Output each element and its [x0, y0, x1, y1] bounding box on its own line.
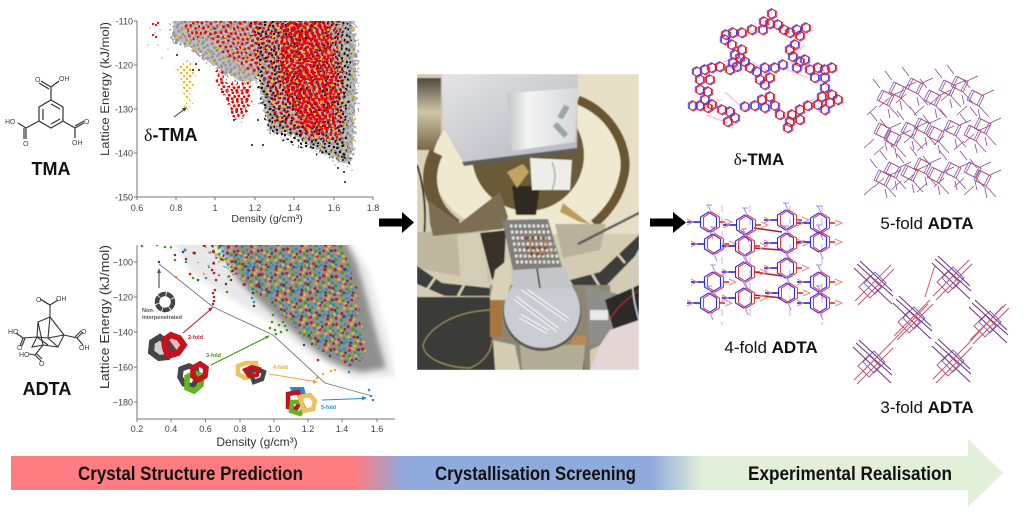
axes: ADTA plot: −180 [113, 398, 133, 408]
axes: TMA plot [100, 16, 379, 225]
hub [472, 128, 584, 211]
axes: TMA plot: 1 [212, 203, 218, 213]
stage base [490, 285, 612, 370]
axes: TMA plot: 0.6 [131, 203, 143, 213]
annotation: delta-TMA arrow and label: δ-TMA [144, 125, 197, 145]
axes: TMA plot: -140 [115, 148, 133, 158]
workflow arrow [11, 439, 1003, 507]
axes: TMA plot: -110 [116, 16, 133, 26]
icon: ADTA molecule: OH [56, 296, 66, 303]
icon: ADTA molecule: HO [19, 352, 30, 359]
axes: ADTA plot: 1.0 [268, 424, 280, 434]
label: ADTA: ADTA [23, 379, 71, 399]
label: delta-TMA: δ-TMA [734, 150, 784, 169]
callout: 5-fold [288, 387, 367, 414]
icon: TMA molecule [5, 76, 90, 148]
chart: ADTA lattice energy vs density scatter [100, 245, 395, 448]
annotation: delta-TMA arrow and label [144, 107, 197, 145]
axes: ADTA plot: 1.4 [336, 424, 348, 434]
axes: ADTA plot: −160 [113, 362, 133, 372]
well plate [502, 219, 562, 270]
axes: TMA plot: Lattice Energy (kJ/mol) [100, 22, 112, 156]
icon: ADTA molecule: OH [79, 345, 90, 352]
axes: TMA plot: 1.8 [367, 203, 379, 213]
dark segmented bands [417, 266, 490, 296]
axes: TMA plot: 0.8 [170, 203, 182, 213]
axes: TMA plot: 1.6 [328, 203, 340, 213]
axes: TMA plot: 1.4 [288, 203, 300, 213]
brown ring arcs [430, 153, 456, 226]
axes: TMA plot: -150 [115, 192, 133, 202]
callout: non-interpenetrated [142, 268, 182, 321]
axes: ADTA plot: 0.4 [165, 424, 177, 434]
axes: ADTA plot: Lattice Energy (kJ/mol) [97, 245, 112, 389]
axes: ADTA plot: 0.8 [234, 424, 246, 434]
metal arm [428, 192, 508, 236]
axes: ADTA plot: Density (g/cm³) [216, 435, 298, 449]
icon: ADTA molecule: O [39, 361, 45, 368]
label: TMA: TMA [32, 159, 70, 179]
crystal structure: 4-fold ADTA [687, 203, 842, 325]
white module [530, 158, 572, 190]
crystal structure: 5-fold ADTA [864, 65, 1001, 198]
crystal structure: 3-fold ADTA [853, 256, 1009, 384]
axes: TMA plot: -120 [115, 60, 133, 70]
arrow: to structures [650, 212, 686, 233]
callout: 3-fold: 3-fold [206, 353, 221, 359]
callout: 2-fold: 2-fold [188, 335, 203, 341]
detector hood [442, 74, 578, 162]
axes: ADTA plot: −100 [113, 258, 133, 268]
stage: Crystal Structure Prediction: Crystal Structure Prediction [78, 464, 303, 485]
icon: TMA molecule: O [84, 119, 90, 126]
axes: ADTA plot: −120 [113, 292, 133, 302]
label: 4-fold ADTA: 4-fold ADTA [724, 338, 818, 357]
icon: ADTA molecule: O [81, 329, 87, 336]
arrow: to photo [379, 212, 414, 233]
chart: TMA lattice energy vs density scatter [100, 18, 379, 224]
icon: TMA molecule: O [23, 141, 29, 148]
callout: 5-fold: 5-fold [321, 405, 336, 411]
axes: ADTA plot: 1.6 [371, 424, 383, 434]
axes: TMA plot: -130 [115, 104, 133, 114]
callout: 4-fold [238, 363, 318, 384]
mid-left surfaces [417, 232, 490, 282]
crystal structure: delta-TMA [688, 9, 843, 133]
axes: ADTA plot [97, 245, 395, 449]
callout: 2-fold [151, 307, 213, 358]
callout: non-interpenetrated: interpenetrated [142, 315, 182, 321]
axes: ADTA plot: 0.6 [199, 424, 212, 434]
icon: TMA molecule: HO [5, 119, 16, 126]
stage: Crystallisation Screening: Crystallisation Screening [435, 464, 636, 485]
plate carrier [507, 266, 573, 290]
label: 5-fold ADTA: 5-fold ADTA [880, 214, 974, 233]
icon: ADTA molecule [8, 296, 90, 368]
sample disc [502, 296, 582, 352]
callout: 4-fold: 4-fold [273, 365, 288, 371]
icon: TMA molecule: OH [72, 140, 82, 147]
axes: ADTA plot: 1.2 [302, 424, 314, 434]
stage: Experimental Realisation: Experimental Realisation [748, 464, 952, 485]
axes: ADTA plot: −140 [113, 328, 133, 338]
left floor [417, 297, 495, 370]
label: 3-fold ADTA: 3-fold ADTA [880, 398, 974, 417]
callout: non-interpenetrated: Non- [142, 308, 155, 314]
axes: TMA plot: 1.2 [249, 203, 261, 213]
icon: ADTA molecule: HO [8, 329, 19, 336]
callout: 3-fold [180, 336, 270, 391]
icon: TMA molecule: OH [59, 76, 70, 83]
icon: TMA molecule: O [35, 77, 41, 84]
axes: ADTA plot: 0.2 [131, 424, 143, 434]
polymorph energy line [159, 264, 372, 396]
cream ring [433, 106, 620, 235]
panel: diffractometer photo [417, 74, 639, 370]
icon: ADTA molecule: O [36, 297, 42, 304]
icon: ADTA molecule: O [17, 345, 23, 352]
axes: TMA plot: Density (g/cm³) [231, 213, 303, 225]
